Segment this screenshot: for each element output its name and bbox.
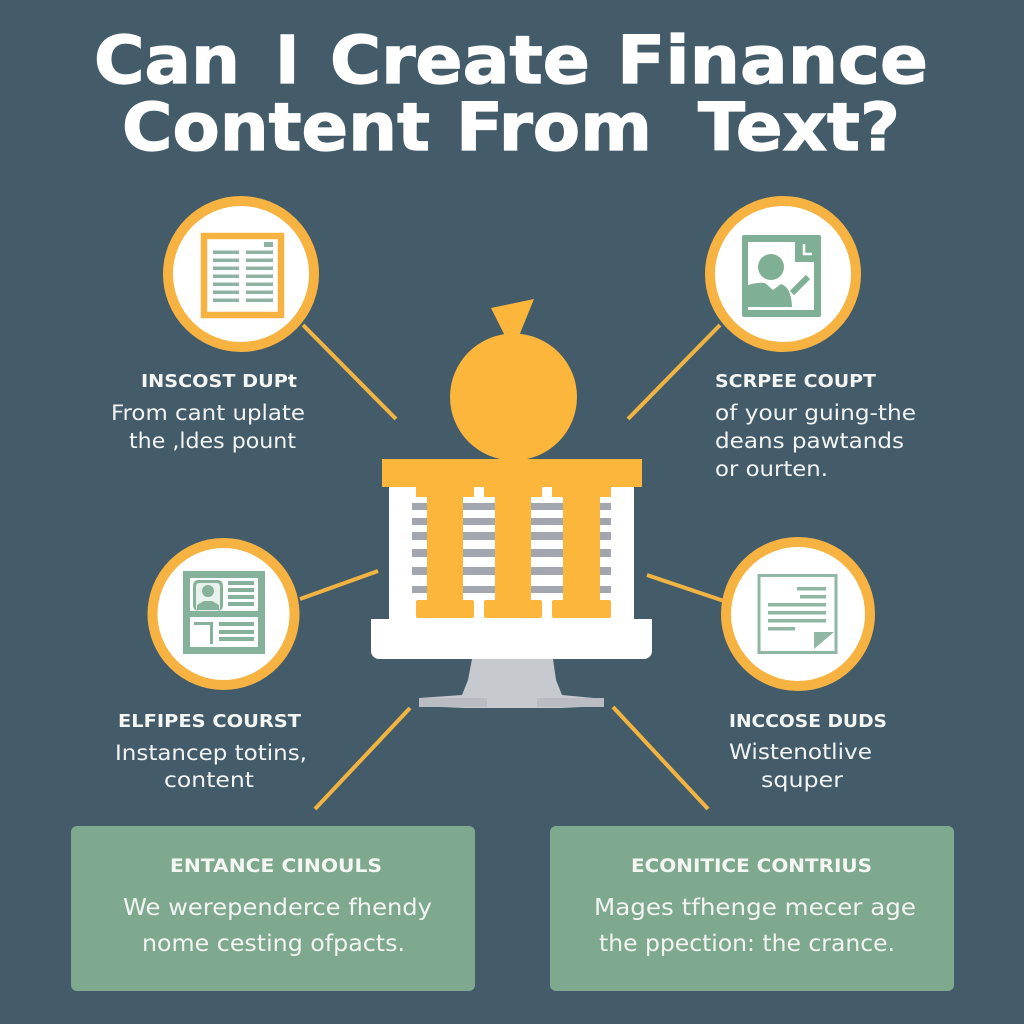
- icon: bank columns and roof: [382, 459, 642, 618]
- icon circle: middle left profile card: [152, 543, 294, 685]
- label: top left: [111, 371, 305, 454]
- icon: monitor stand: [419, 659, 604, 708]
- title: Content: [122, 89, 430, 166]
- title: [94, 22, 928, 166]
- title: Finance: [617, 22, 928, 99]
- label: top right: of your guing-the: [715, 401, 916, 426]
- label: middle right: [729, 711, 887, 793]
- label: top left: the ,ldes pount: [129, 429, 296, 454]
- label: top left: INSCOST DUPt: [141, 371, 297, 392]
- panel: bottom left: nome cesting ofpacts.: [142, 931, 405, 957]
- label: top right: deans pawtands: [715, 429, 904, 454]
- panel: bottom right: [550, 826, 954, 991]
- connector lines: [300, 325, 724, 809]
- label: middle left: ELFIPES COURST: [118, 711, 302, 732]
- title: Can: [94, 22, 240, 99]
- label: middle right: squper: [761, 768, 843, 793]
- title: Text?: [698, 89, 900, 166]
- label: middle right: INCCOSE DUDS: [729, 711, 887, 732]
- label: middle left: [115, 711, 307, 793]
- label: top left: From cant uplate: [111, 401, 305, 426]
- label: top right: [715, 371, 916, 482]
- label: middle left: Instancep totins,: [115, 741, 307, 766]
- icon circle: top left document: [168, 201, 314, 347]
- icon circle: middle right page: [726, 542, 870, 686]
- label: top right: SCRPEE COUPT: [715, 371, 877, 392]
- panel: bottom right: Mages tfhenge mecer age: [594, 895, 916, 921]
- panel: bottom left: [71, 826, 475, 991]
- central illustration: bank on monitor with coin: [371, 299, 652, 708]
- panel: bottom left: We werependerce fhendy: [123, 895, 432, 921]
- panel: bottom left: ENTANCE CINOULS: [170, 855, 382, 877]
- title: Create: [330, 22, 590, 99]
- text stripes: [412, 503, 611, 593]
- icon: coin bag tie: [491, 299, 534, 336]
- panel: bottom right: the ppection: the crance.: [599, 931, 895, 957]
- icon: monitor screen: [371, 487, 652, 659]
- icon circle: top right profile: [710, 201, 856, 347]
- title: I: [275, 22, 300, 99]
- title: From: [456, 89, 652, 166]
- label: top right: or ourten.: [715, 457, 828, 482]
- panel: bottom right: ECONITICE CONTRIUS: [631, 855, 872, 877]
- label: middle right: Wistenotlive: [729, 740, 872, 765]
- label: middle left: content: [164, 768, 254, 793]
- icon: coin: [450, 334, 577, 460]
